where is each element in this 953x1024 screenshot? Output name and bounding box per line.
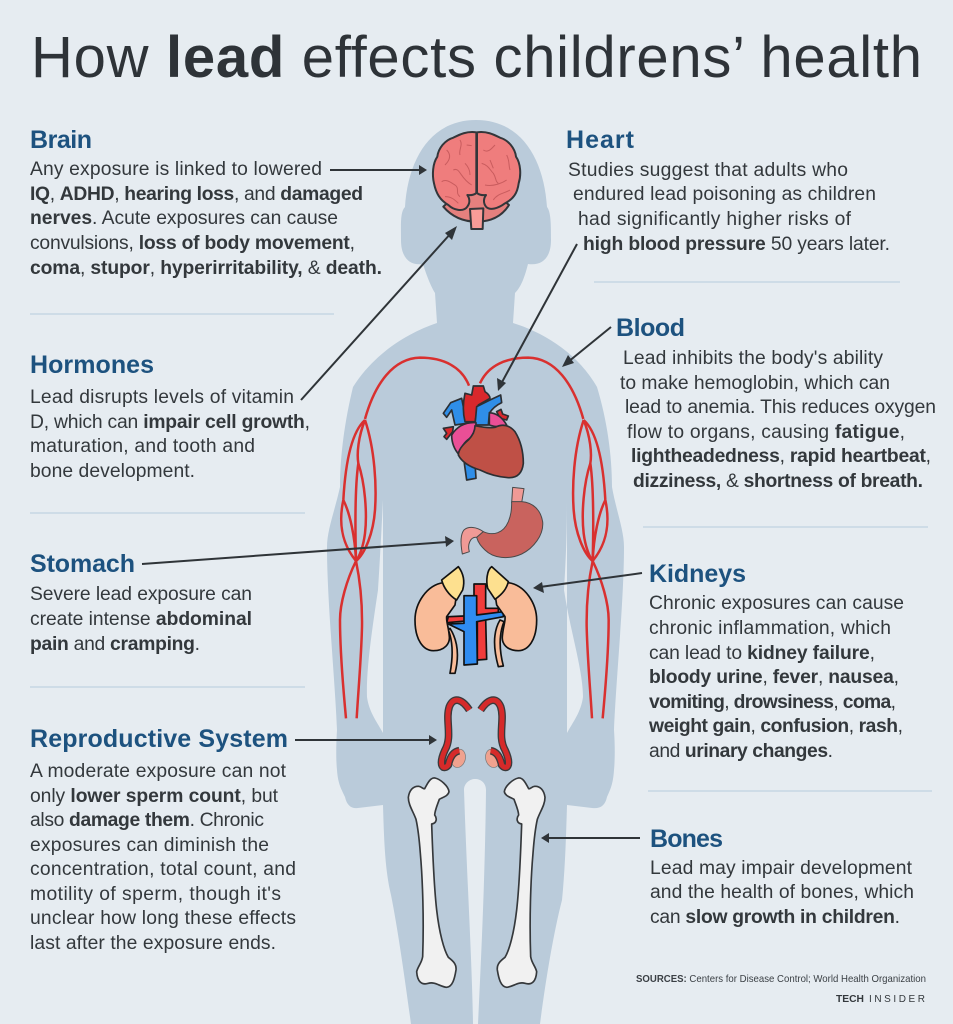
panel: hormones: Hormones bbox=[30, 351, 154, 379]
panel: kidneys: bloody urine, fever, nausea, bbox=[649, 667, 899, 688]
panel: stomach: Stomach bbox=[30, 550, 135, 578]
panel: kidneys: can lead to kidney failure, bbox=[649, 643, 875, 664]
body silhouette bbox=[327, 120, 624, 1024]
arrow: hormones bbox=[301, 226, 457, 400]
icon: heart bbox=[443, 386, 523, 480]
panel: kidneys: weight gain, confusion, rash, bbox=[648, 716, 903, 737]
panel: hormones bbox=[30, 351, 310, 482]
arrow: blood bbox=[562, 327, 611, 367]
title: How lead effects childrens’ health bbox=[31, 25, 922, 90]
panel: blood: Blood bbox=[616, 314, 685, 342]
panel: blood: Lead inhibits the body's ability bbox=[623, 348, 883, 369]
panel: heart bbox=[566, 126, 890, 255]
panel: kidneys: vomiting, drowsiness, coma, bbox=[649, 692, 896, 713]
panel: hormones: Lead disrupts levels of vitamin bbox=[30, 387, 294, 408]
panel: hormones: maturation, and tooth and bbox=[30, 436, 255, 457]
arrow: brain bbox=[330, 165, 427, 175]
panel: hormones: D, which can impair cell growth, bbox=[30, 412, 310, 433]
arrow: stomach bbox=[142, 536, 454, 564]
icon: bones bbox=[408, 778, 545, 987]
panel: blood: lead to anemia. This reduces oxygen bbox=[625, 397, 936, 418]
panel: blood: lightheadedness, rapid heartbeat, bbox=[631, 446, 931, 467]
panel: brain: IQ, ADHD, hearing loss, and damaged bbox=[30, 184, 363, 205]
panel: blood bbox=[616, 314, 936, 492]
panel: brain: convulsions, loss of body movement, bbox=[30, 233, 355, 254]
panel: reproductive system: Reproductive System bbox=[30, 725, 288, 753]
panel: kidneys: and urinary changes. bbox=[649, 741, 833, 762]
panel: heart: had significantly higher risks of bbox=[578, 209, 852, 230]
icon: reproductive system bbox=[441, 700, 509, 769]
panel: kidneys bbox=[648, 560, 904, 762]
panel: brain: coma, stupor, hyperirritability, & death. bbox=[30, 258, 382, 279]
panel: kidneys: chronic inflammation, which bbox=[649, 618, 891, 639]
panel: reproductive system bbox=[30, 725, 296, 954]
panel: blood: flow to organs, causing fatigue, bbox=[627, 422, 905, 443]
icon: stomach bbox=[461, 487, 543, 558]
panel: stomach: pain and cramping. bbox=[30, 634, 200, 655]
panel: heart: endured lead poisoning as children bbox=[573, 184, 876, 205]
arrow: reproductive bbox=[295, 735, 437, 745]
panel: bones: can slow growth in children. bbox=[650, 907, 900, 928]
icon: kidneys bbox=[415, 567, 537, 673]
arrow: kidneys bbox=[533, 573, 642, 593]
logo: tech insider: INSIDER bbox=[869, 994, 925, 1005]
sources: SOURCES: Centers for Disease Control; World Health Organization bbox=[636, 973, 926, 985]
arrow: heart bbox=[497, 244, 577, 391]
icon: brain bbox=[433, 132, 520, 229]
panel: stomach bbox=[30, 550, 252, 655]
panel: bones: and the health of bones, which bbox=[650, 882, 914, 903]
panel: reproductive system: last after the exposure ends. bbox=[30, 933, 276, 954]
panel: blood: to make hemoglobin, which can bbox=[620, 373, 890, 394]
panel: brain bbox=[30, 126, 382, 279]
panel: reproductive system: concentration, total count, and bbox=[30, 859, 296, 880]
panel: heart: Studies suggest that adults who bbox=[568, 160, 848, 181]
logo: tech insider: TECH bbox=[836, 994, 864, 1005]
panel: bones: Bones bbox=[650, 825, 723, 853]
panel: hormones: bone development. bbox=[30, 461, 195, 482]
panel: brain: Brain bbox=[30, 126, 92, 154]
arrow: bones bbox=[541, 833, 640, 843]
panel: brain: nerves. Acute exposures can cause bbox=[30, 208, 338, 229]
logo: tech insider bbox=[836, 994, 925, 1005]
panel: kidneys: Kidneys bbox=[649, 560, 746, 588]
panel: reproductive system: also damage them. Chronic bbox=[30, 810, 264, 831]
panel: heart: high blood pressure 50 years later. bbox=[583, 234, 890, 255]
panel: bones: Lead may impair development bbox=[650, 858, 913, 879]
panel: reproductive system: exposures can diminish the bbox=[30, 835, 269, 856]
panel: reproductive system: only lower sperm count, but bbox=[30, 786, 279, 807]
panel: reproductive system: A moderate exposure can not bbox=[30, 761, 287, 782]
arteries bbox=[340, 358, 609, 718]
panel: stomach: create intense abdominal bbox=[30, 609, 252, 630]
panel: reproductive system: motility of sperm, though it's bbox=[30, 884, 281, 905]
panel: reproductive system: unclear how long these effects bbox=[30, 908, 296, 929]
panel: heart: Heart bbox=[566, 126, 635, 154]
panel: kidneys: Chronic exposures can cause bbox=[649, 593, 904, 614]
panel: brain: Any exposure is linked to lowered bbox=[30, 159, 322, 180]
panel: stomach: Severe lead exposure can bbox=[30, 584, 252, 605]
panel: bones bbox=[650, 825, 914, 928]
panel: blood: dizziness, & shortness of breath. bbox=[633, 471, 923, 492]
